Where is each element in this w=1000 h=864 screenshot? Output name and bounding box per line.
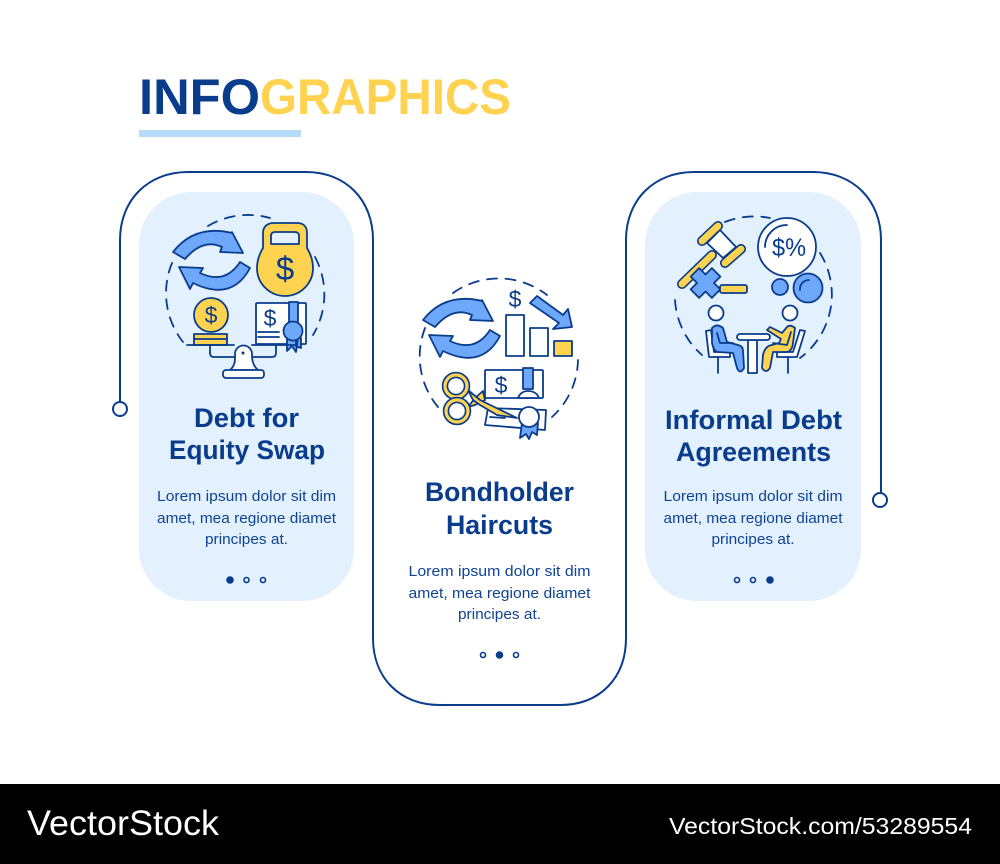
text block: informal debt agreements: amet, mea regione diamet xyxy=(664,510,843,527)
icon: kettlebell xyxy=(257,223,313,296)
text block: informal debt agreements: Lorem ipsum dolor sit dim xyxy=(664,488,842,505)
text block: informal debt agreements: principes at. xyxy=(712,531,794,548)
icon: certificate: $ xyxy=(264,305,277,331)
pagination dots: third active xyxy=(734,577,773,583)
heading: bondholder haircuts xyxy=(425,477,574,540)
icon: cut certificates xyxy=(485,368,546,439)
title: GRAPHICS xyxy=(260,69,511,125)
icon: cross mark xyxy=(684,262,727,304)
icon: balance scale xyxy=(187,345,297,378)
heading: informal debt agreements: Agreements xyxy=(676,437,831,467)
heading: bondholder haircuts: Haircuts xyxy=(446,510,553,540)
text block: debt for equity swap xyxy=(157,488,337,548)
icon: informal debt agreements xyxy=(675,216,832,373)
heading: debt for equity swap: Debt for xyxy=(194,403,299,433)
text block: bondholder haircuts xyxy=(408,563,591,623)
panel: informal debt agreements background xyxy=(645,192,861,601)
text block: bondholder haircuts: Lorem ipsum dolor sit dim xyxy=(408,563,590,580)
title: INFO xyxy=(139,69,260,125)
icon: cut certificates: $ xyxy=(495,372,508,398)
heading: debt for equity swap: Equity Swap xyxy=(169,435,325,465)
icon: certificate xyxy=(256,302,306,352)
connecting outline xyxy=(113,172,887,705)
text block: bondholder haircuts: principes at. xyxy=(458,606,541,623)
icon: bondholder haircuts xyxy=(420,278,578,439)
icon: falling bar chart xyxy=(506,315,572,356)
icon: coin stack xyxy=(194,298,228,345)
icon: down arrow xyxy=(530,296,572,329)
heading: debt for equity swap xyxy=(169,403,325,465)
pagination dots: second active xyxy=(480,652,518,658)
icon: minus bar xyxy=(720,285,747,293)
icon: table xyxy=(737,334,770,373)
footer band: VectorStock xyxy=(27,804,220,843)
icon: debt for equity swap xyxy=(166,215,324,378)
heading: informal debt agreements xyxy=(665,405,842,467)
icon: percent bubble xyxy=(758,218,816,276)
panel: debt for equity swap background xyxy=(139,192,354,601)
text block: bondholder haircuts: amet, mea regione diamet xyxy=(408,585,591,602)
footer band: VectorStock.com/53289554 xyxy=(669,813,972,839)
icon: kettlebell: $ xyxy=(276,250,294,287)
icon: scissors xyxy=(445,375,517,422)
text block: debt for equity swap: Lorem ipsum dolor sit dim xyxy=(157,488,336,505)
title underline xyxy=(139,130,301,137)
text block: informal debt agreements xyxy=(664,488,843,548)
icon: coin stack: $ xyxy=(205,302,218,328)
icon: dollar sign: $ xyxy=(509,286,522,312)
icon: small bubbles xyxy=(772,274,822,302)
text block: debt for equity swap: principes at. xyxy=(205,531,288,548)
icon: percent bubble: $% xyxy=(772,234,806,262)
text block: debt for equity swap: amet, mea regione diamet xyxy=(157,510,337,527)
icon: right person xyxy=(762,306,805,373)
title xyxy=(139,69,511,125)
icon: gavel xyxy=(682,226,741,284)
footer band xyxy=(0,784,1000,864)
heading: bondholder haircuts: Bondholder xyxy=(425,477,574,507)
icon: swap arrows xyxy=(423,299,500,358)
heading: informal debt agreements: Informal Debt xyxy=(665,405,842,435)
pagination dots: first active xyxy=(227,577,266,583)
icon: left person xyxy=(706,306,744,373)
icon: swap arrows xyxy=(173,231,250,290)
